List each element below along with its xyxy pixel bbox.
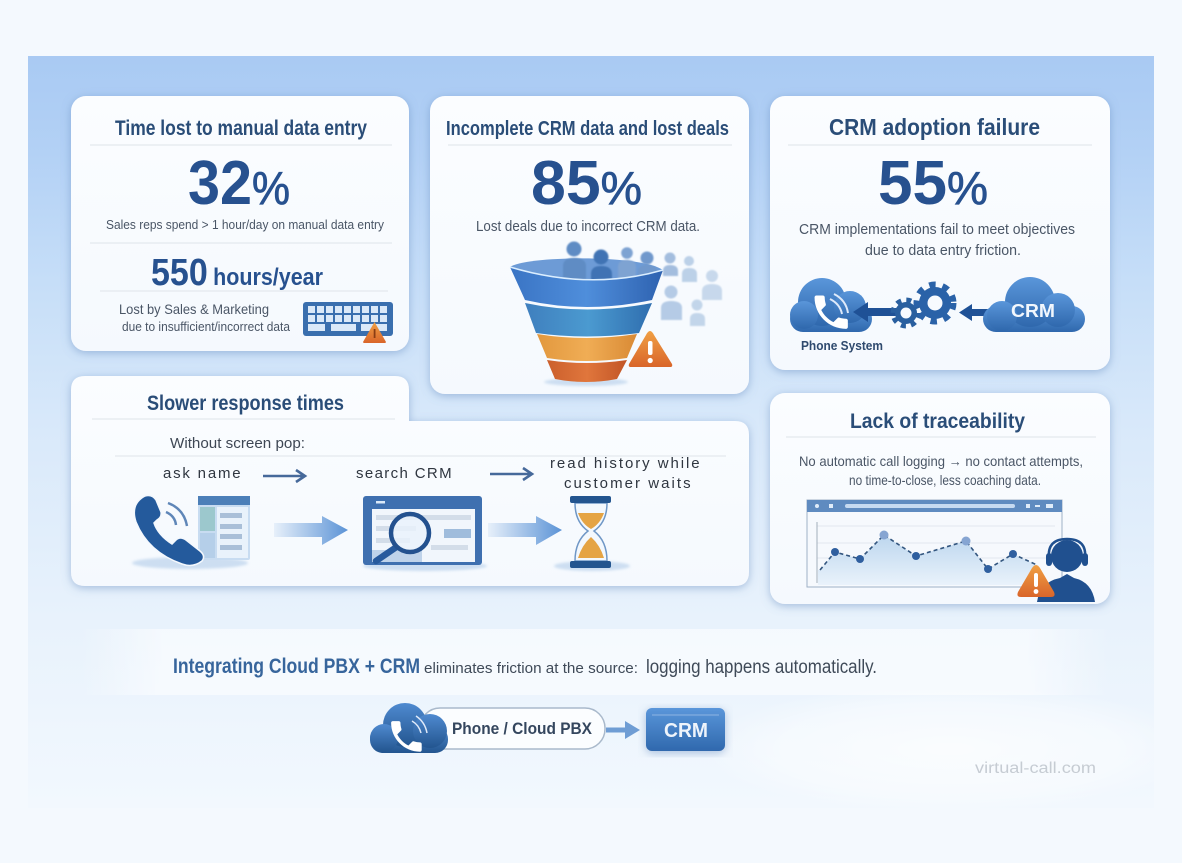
- chart: call log line chart: [807, 500, 1062, 587]
- arrow: search CRM to read history: [490, 468, 532, 480]
- stat: 55%: 55%: [878, 149, 988, 218]
- step label: read history: customer waits: [564, 475, 692, 492]
- stat description: Sales reps spend > 1 hour/day on manual data entry: [106, 217, 384, 232]
- conclusion statement: Integrating Cloud PBX + CRM: [173, 655, 420, 678]
- stat: 85%: 85%: [531, 149, 642, 218]
- arrow: search to hourglass: [488, 516, 562, 545]
- icon: funnel: [510, 267, 663, 386]
- heading: CRM adoption failure: [829, 114, 1040, 140]
- soft white glow of footer area: [80, 629, 1110, 695]
- heading: Time lost to manual data entry: [115, 117, 367, 140]
- panel: CRM adoption failure: [770, 96, 1110, 370]
- description of 550 hours: due to insufficient/incorrect data: [122, 319, 291, 334]
- description of 550 hours: Lost by Sales & Marketing: [119, 301, 269, 317]
- stat description: due to data entry friction.: [865, 242, 1021, 259]
- label: phone system: Phone System: [801, 339, 883, 353]
- icon: gears: [893, 284, 954, 326]
- pill: phone / cloud PBX: Phone / Cloud PBX: [452, 719, 593, 738]
- heading: Incomplete CRM data and lost deals: [446, 118, 729, 140]
- icon: CRM cloud: [983, 277, 1085, 332]
- arrow: CRM to gears: [959, 304, 1000, 321]
- panel: incomplete CRM data and lost deals: [430, 96, 749, 394]
- description: no time-to-close, less coaching data.: [849, 472, 1041, 488]
- step label: read history: read history while: [550, 455, 701, 472]
- icon: warning triangle: [1017, 565, 1055, 597]
- conclusion statement: eliminates friction at the source:: [424, 660, 638, 677]
- step label: ask name: ask name: [163, 465, 242, 482]
- heading: Lack of traceability: [850, 410, 1025, 433]
- description: No automatic call logging → no contact attempts,: [799, 453, 1083, 469]
- icon: warning triangle: [629, 331, 672, 367]
- step label: search CRM: search CRM: [356, 465, 453, 482]
- arrow: ask name to search CRM: [263, 470, 305, 482]
- panel: lack of traceability: [770, 393, 1110, 604]
- icon: CRM window with magnifier: [363, 496, 487, 571]
- arrow: phone to search: [274, 516, 348, 545]
- icon: keyboard with warning: [303, 302, 393, 343]
- arrow: gears to phone system: [853, 302, 897, 322]
- diagram: Cloud PBX to CRM: [370, 703, 725, 753]
- soft white glow lower right: [700, 690, 1154, 808]
- panel: slower response times: [71, 376, 749, 586]
- box: CRM: [646, 708, 725, 751]
- icon: funnel back rim: [510, 258, 663, 279]
- icon: phone with contact panel: [132, 496, 250, 569]
- icon: agent with headset: [1037, 539, 1095, 602]
- icon: CRM cloud: CRM: [1011, 301, 1055, 321]
- stat: 550 hours per year: 550hours/year: [151, 252, 323, 294]
- icon: hourglass: [554, 496, 630, 571]
- icon: people entering funnel: [563, 242, 722, 326]
- sub-heading: Without screen pop:: [170, 435, 305, 452]
- box: CRM: CRM: [664, 720, 708, 742]
- stat: 32%: 32%: [188, 149, 290, 218]
- icon: phone system cloud: [790, 278, 872, 332]
- watermark: virtual-call.com: [975, 760, 1096, 777]
- icon: phone cloud: [370, 703, 448, 753]
- arrow: PBX to CRM: [606, 721, 640, 739]
- stat description: CRM implementations fail to meet objectives: [799, 221, 1075, 238]
- stat description: Lost deals due to incorrect CRM data.: [476, 218, 700, 235]
- conclusion statement: logging happens automatically.: [646, 657, 877, 678]
- heading: Slower response times: [147, 392, 344, 415]
- pill: phone / cloud PBX: [420, 708, 605, 749]
- panel: time lost to manual data entry: [71, 96, 409, 351]
